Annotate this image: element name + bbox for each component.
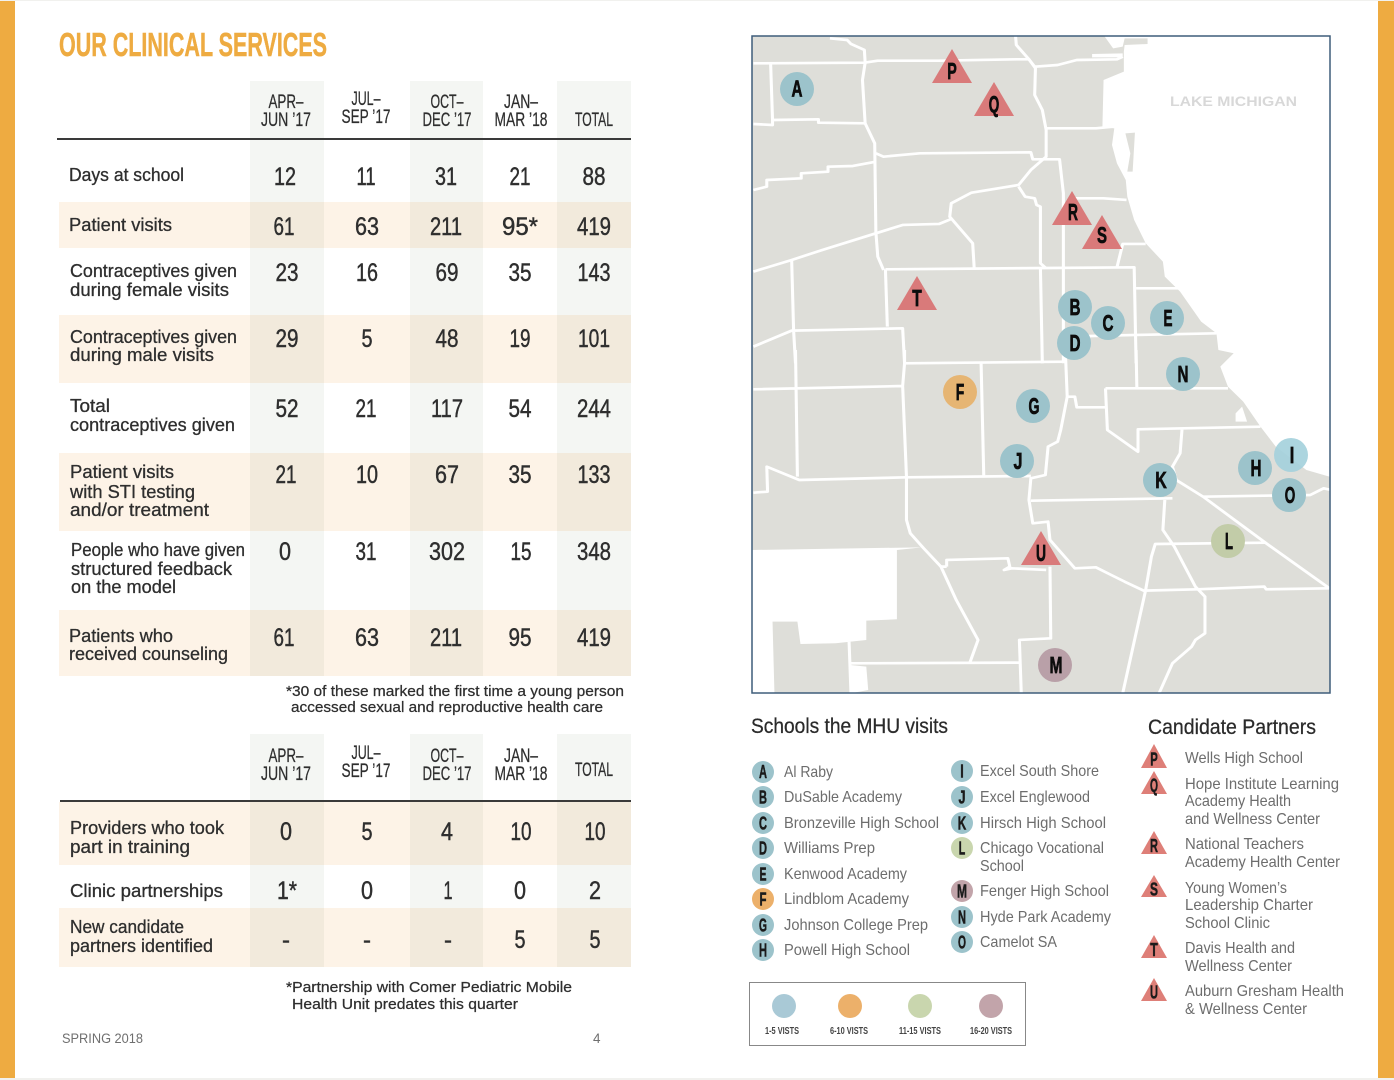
row: patient visits: 61 — [274, 213, 294, 241]
row: structured feedback: People who have given — [71, 539, 245, 560]
key: candidate partners: S — [1150, 880, 1158, 900]
key: candidate partners: Auburn Gresham Health — [1185, 983, 1344, 1000]
row: structured feedback: 15 — [510, 538, 532, 566]
row: clinic partnerships: Clinic partnerships — [70, 880, 223, 901]
row: days at school: 12 — [274, 163, 296, 191]
map markers: schools: E — [1164, 305, 1172, 331]
second table header labels: TOTAL — [575, 760, 613, 781]
key: candidate partners: Wellness Center — [1185, 958, 1293, 975]
row: structured feedback: on the model — [71, 576, 176, 597]
row: contraceptives male: 29 — [276, 325, 298, 353]
second table header labels: OCT– — [430, 746, 464, 767]
second table header labels: APR– — [268, 746, 304, 767]
key: schools first column: D — [759, 838, 767, 858]
row: STI testing: 35 — [508, 461, 532, 489]
row: patient visits — [69, 213, 611, 241]
row: providers trained: 10 — [510, 818, 532, 846]
map markers: schools: L — [1225, 528, 1233, 554]
key: candidate partners — [1141, 744, 1344, 1018]
row: total contraceptives: 52 — [276, 395, 298, 423]
row: STI testing: 133 — [578, 461, 610, 489]
key: candidate partners: Wells High School — [1185, 750, 1303, 767]
row: contraceptives male: 48 — [436, 325, 458, 353]
row: total contraceptives: 244 — [577, 395, 611, 423]
row: counseling: Patients who — [69, 625, 173, 646]
key: schools first column: Al Raby — [784, 764, 833, 781]
map markers: candidate partners: R — [1068, 199, 1078, 225]
row: structured feedback: 348 — [577, 538, 611, 566]
key: schools second column: N — [958, 908, 966, 928]
table header labels: JAN– — [504, 92, 538, 113]
table header labels: OCT– — [430, 92, 464, 113]
map label: Lake Michigan: LAKE MICHIGAN — [1170, 93, 1297, 109]
row: clinic partnerships: 1* — [277, 877, 297, 905]
second table header labels — [261, 743, 613, 785]
row: providers trained: 4 — [441, 818, 453, 846]
row: structured feedback — [71, 538, 611, 597]
table header labels: TOTAL — [575, 110, 613, 131]
row: contraceptives female: 35 — [508, 259, 532, 287]
second table header labels: SEP ’17 — [342, 761, 390, 782]
row: structured feedback: 31 — [356, 538, 376, 566]
heading: candidate partners: Candidate Partners — [1148, 716, 1316, 739]
row: new candidate partners: - — [363, 926, 371, 954]
legend: visit counts — [750, 982, 1026, 1046]
key: candidate partners: R — [1150, 836, 1158, 856]
row: contraceptives female: 69 — [436, 259, 458, 287]
key: candidate partners: Academy Health Center — [1185, 854, 1341, 871]
footnote: first table: accessed sexual and reproductive health care — [291, 699, 603, 716]
row: counseling — [69, 624, 611, 664]
row: days at school: Days at school — [69, 164, 184, 185]
key: schools first column: Kenwood Academy — [784, 866, 907, 883]
map markers: schools — [780, 72, 1308, 682]
heading: schools: Schools the MHU visits — [751, 715, 948, 738]
row: new candidate partners: 5 — [590, 926, 600, 954]
key: schools second column: Camelot SA — [980, 934, 1057, 951]
row: counseling: 211 — [430, 624, 462, 652]
table header labels: SEP ’17 — [342, 107, 390, 128]
map markers: candidate partners: S — [1097, 222, 1107, 248]
row: STI testing: with STI testing — [69, 481, 195, 502]
row: structured feedback: structured feedback — [71, 558, 233, 579]
map markers: candidate partners: P — [947, 58, 957, 84]
key: schools second column: Excel Englewood — [980, 789, 1090, 806]
table header labels: MAR ’18 — [494, 110, 548, 131]
key: schools second column: Excel South Shore — [980, 763, 1099, 780]
map markers: candidate partners: U — [1036, 540, 1046, 566]
key: candidate partners: P — [1150, 750, 1158, 770]
key: candidate partners: T — [1150, 940, 1158, 960]
row: total contraceptives: 117 — [431, 395, 463, 423]
row: contraceptives male: 5 — [362, 325, 372, 353]
second table header labels: JUN ’17 — [261, 764, 311, 785]
row: contraceptives male — [70, 325, 610, 365]
row: days at school: 21 — [510, 163, 530, 191]
row: contraceptives female: 23 — [276, 259, 298, 287]
row: STI testing: Patient visits — [70, 461, 174, 482]
key: schools second column: Fenger High School — [980, 883, 1109, 900]
key: schools first column — [752, 761, 939, 961]
row: contraceptives male: 19 — [510, 325, 530, 353]
key: schools first column: Bronzeville High School — [784, 815, 939, 832]
map markers: candidate partners: Q — [989, 91, 999, 117]
key: schools second column: Hyde Park Academy — [980, 909, 1111, 926]
key: schools second column — [951, 760, 1111, 953]
map markers: schools: J — [1014, 448, 1022, 474]
key: schools first column: Powell High School — [784, 942, 910, 959]
legend: visit counts: 6-10 VISTS — [830, 1026, 868, 1037]
row: new candidate partners — [70, 916, 600, 956]
key: schools first column: F — [760, 890, 766, 910]
row: STI testing: 67 — [435, 461, 459, 489]
second table header labels: MAR ’18 — [494, 764, 548, 785]
row: structured feedback: 302 — [429, 538, 465, 566]
row: STI testing — [69, 461, 611, 520]
table header labels — [261, 89, 613, 131]
row: providers trained — [70, 817, 606, 857]
key: schools first column: A — [759, 762, 767, 782]
table: clinical services by quarter — [57, 81, 631, 676]
right orange side bar — [1378, 1, 1394, 1078]
second table header labels: JAN– — [504, 746, 538, 767]
table header labels: DEC ’17 — [422, 110, 472, 131]
table header labels: JUN ’17 — [261, 110, 311, 131]
row: contraceptives female: during female visits — [70, 279, 229, 300]
row: contraceptives female: 143 — [578, 259, 610, 287]
row: days at school — [69, 163, 606, 191]
table: training and partnerships — [59, 734, 631, 967]
key: candidate partners: U — [1150, 982, 1158, 1002]
key: candidate partners: Davis Health and — [1185, 940, 1295, 957]
map of Chicago school locations — [751, 35, 1352, 693]
key: candidate partners: and Wellness Center — [1185, 811, 1321, 828]
row: clinic partnerships: 0 — [514, 877, 526, 905]
row: providers trained: 0 — [280, 818, 292, 846]
row: patient visits: 211 — [430, 213, 462, 241]
key: schools second column: School — [980, 858, 1024, 875]
footnote: second table: Health Unit predates this quarter — [292, 996, 518, 1013]
row: patient visits: 95* — [502, 213, 538, 241]
row: STI testing: 10 — [356, 461, 378, 489]
key: schools second column: Hirsch High School — [980, 815, 1106, 832]
row: counseling: 419 — [577, 624, 611, 652]
title: OUR CLINICAL SERVICES — [59, 26, 327, 63]
row: counseling: 63 — [355, 624, 379, 652]
row: counseling: received counseling — [69, 643, 228, 664]
map markers: schools: B — [1070, 294, 1080, 320]
map markers: schools: O — [1285, 482, 1295, 508]
key: schools first column: Williams Prep — [784, 840, 875, 857]
row: total contraceptives: Total — [70, 395, 110, 416]
row: contraceptives female: 16 — [356, 259, 378, 287]
map markers: schools: K — [1155, 467, 1167, 493]
key: schools second column: M — [957, 882, 967, 902]
map markers: candidate partners: T — [912, 285, 922, 311]
key: candidate partners: Hope Institute Learning — [1185, 776, 1339, 793]
key: schools first column: Johnson College Prep — [784, 917, 928, 934]
row: counseling: 95 — [508, 624, 532, 652]
legend: visit counts: 11-15 VISTS — [899, 1026, 941, 1037]
footnote: first table: *30 of these marked the first time a young person — [286, 683, 624, 700]
key: schools first column: B — [759, 788, 767, 808]
table header labels: APR– — [268, 92, 304, 113]
left orange side bar — [0, 1, 15, 1078]
row: contraceptives male: Contraceptives given — [70, 326, 237, 347]
table header labels: JUL– — [352, 89, 381, 110]
key: schools first column: H — [759, 940, 767, 960]
row: providers trained: 10 — [584, 818, 606, 846]
row: clinic partnerships: 1 — [444, 877, 452, 905]
row: patient visits: Patient visits — [69, 214, 172, 235]
map markers: candidate partners — [897, 49, 1122, 566]
key: candidate partners: Young Women’s — [1185, 880, 1287, 897]
map markers: schools: H — [1250, 455, 1262, 481]
map markers: schools: I — [1290, 442, 1294, 468]
key: schools second column: J — [958, 788, 966, 808]
key: candidate partners: School Clinic — [1185, 915, 1270, 932]
key: candidate partners: Q — [1150, 776, 1158, 796]
map markers: schools: M — [1050, 652, 1062, 678]
key: candidate partners: Leadership Charter — [1185, 897, 1314, 914]
row: new candidate partners: partners identified — [70, 935, 213, 956]
map markers: schools: A — [792, 76, 802, 102]
row: contraceptives male: 101 — [578, 325, 610, 353]
row: providers trained: part in training — [70, 836, 190, 857]
row: total contraceptives: 21 — [356, 395, 376, 423]
map markers: schools: D — [1070, 330, 1080, 356]
row: STI testing: and/or treatment — [70, 499, 209, 520]
row: days at school: 88 — [582, 163, 606, 191]
footer: issue: SPRING 2018 — [62, 1031, 143, 1046]
footnote: first table — [286, 683, 624, 716]
key: candidate partners: National Teachers — [1185, 836, 1304, 853]
key: schools second column: K — [958, 814, 966, 834]
row: clinic partnerships: 0 — [361, 877, 373, 905]
key: schools first column: C — [759, 814, 767, 834]
key: schools first column: G — [759, 916, 767, 936]
row: new candidate partners: - — [444, 926, 452, 954]
row: total contraceptives: 54 — [508, 395, 532, 423]
row: patient visits: 63 — [355, 213, 379, 241]
map markers: schools: C — [1102, 310, 1114, 336]
row: new candidate partners: - — [282, 926, 290, 954]
row: providers trained: Providers who took — [70, 817, 225, 838]
row: days at school: 11 — [356, 163, 376, 191]
row: providers trained: 5 — [362, 818, 372, 846]
key: schools first column: DuSable Academy — [784, 789, 902, 806]
legend: visit counts: 16-20 VISTS — [970, 1026, 1012, 1037]
row: days at school: 31 — [435, 163, 457, 191]
row: clinic partnerships — [70, 877, 601, 905]
footer: page number: 4 — [593, 1031, 601, 1046]
key: schools second column: O — [958, 932, 966, 952]
key: schools first column: E — [760, 864, 766, 884]
key: candidate partners: Academy Health — [1185, 793, 1291, 810]
second table header labels: DEC ’17 — [422, 764, 472, 785]
row: contraceptives female: Contraceptives given — [70, 260, 237, 281]
row: total contraceptives — [70, 395, 611, 435]
row: STI testing: 21 — [276, 461, 296, 489]
row: new candidate partners: New candidate — [70, 916, 184, 937]
second table header labels: JUL– — [352, 743, 381, 764]
map markers: schools: N — [1178, 361, 1188, 387]
row: clinic partnerships: 2 — [589, 877, 601, 905]
legend: visit counts: 1-5 VISTS — [765, 1026, 799, 1037]
map markers: schools: G — [1028, 393, 1040, 419]
row: new candidate partners: 5 — [514, 926, 526, 954]
key: schools second column: L — [959, 838, 965, 858]
row: patient visits: 419 — [577, 213, 611, 241]
key: schools first column: Lindblom Academy — [784, 891, 909, 908]
row: total contraceptives: contraceptives given — [70, 414, 235, 435]
key: schools second column: I — [960, 762, 964, 782]
map markers: schools: F — [956, 379, 964, 405]
row: contraceptives female — [70, 259, 610, 300]
row: structured feedback: 0 — [279, 538, 291, 566]
footnote: second table: *Partnership with Comer Pediatric Mobile — [286, 979, 572, 996]
key: schools second column: Chicago Vocational — [980, 840, 1104, 857]
row: contraceptives male: during male visits — [70, 344, 214, 365]
row: counseling: 61 — [274, 624, 294, 652]
footnote: second table — [286, 979, 572, 1013]
key: candidate partners: & Wellness Center — [1185, 1001, 1308, 1018]
